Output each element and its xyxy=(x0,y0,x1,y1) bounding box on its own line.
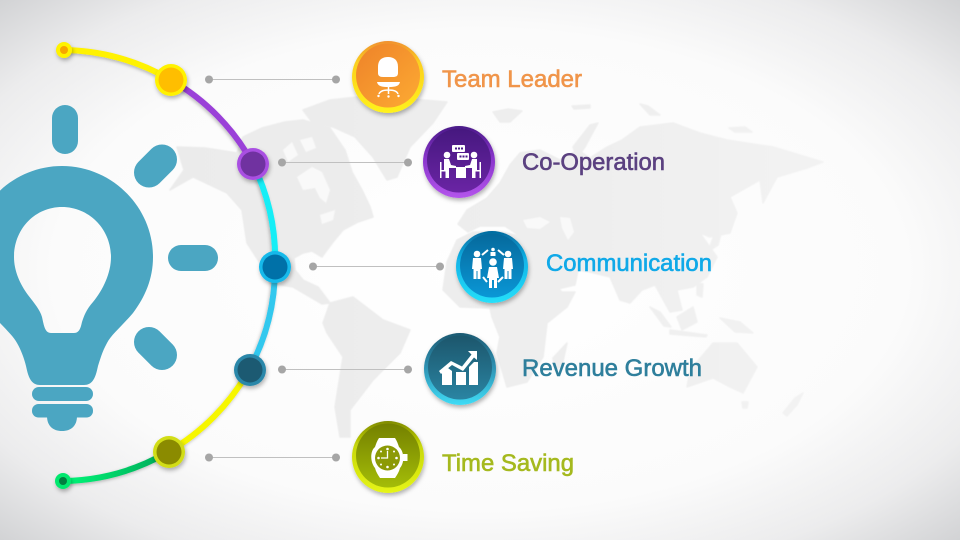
icon: wristwatch (time saving) xyxy=(352,421,424,493)
label: team leader: Team Leader xyxy=(442,66,582,93)
label: time saving: Time Saving xyxy=(442,450,574,477)
icon: people network (communication) xyxy=(456,231,528,303)
world map xyxy=(170,97,823,437)
icon: office chair (team leader) xyxy=(352,41,424,113)
light bulb icon xyxy=(0,166,153,431)
label: communication: Communication xyxy=(546,250,712,277)
curved timeline xyxy=(63,50,275,481)
connector lines xyxy=(205,76,444,462)
timeline nodes xyxy=(55,42,291,489)
icon: meeting (co-operation) xyxy=(423,126,495,198)
icon: growth chart (revenue growth) xyxy=(424,333,496,405)
label: co-operation: Co-Operation xyxy=(522,149,665,176)
bulb rays xyxy=(65,118,205,355)
label: revenue growth: Revenue Growth xyxy=(522,355,702,382)
